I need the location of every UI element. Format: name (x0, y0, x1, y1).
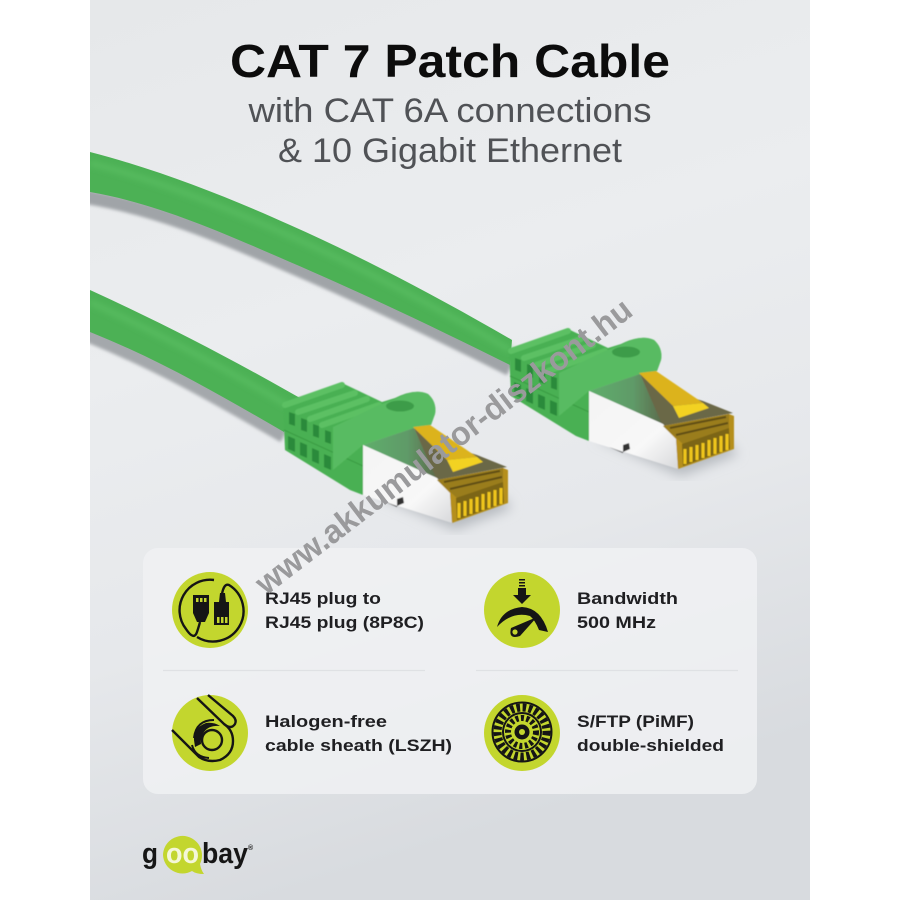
feature text: halogen-free: Halogen-free (265, 712, 387, 731)
lower cable (90, 290, 300, 432)
upper cable shadow (80, 196, 510, 369)
goobay logo: ® (248, 844, 254, 852)
goobay logo: oo (166, 838, 199, 870)
feature text: shielding: S/FTP (PiMF) (577, 712, 694, 731)
feature panel (143, 548, 757, 794)
goobay logo (142, 836, 254, 874)
connector upper (509, 329, 738, 476)
upper cable (90, 152, 512, 365)
feature text: halogen-free (265, 712, 452, 755)
title: CAT 7 Patch Cable (230, 35, 670, 87)
feature text: RJ45: RJ45 plug to (265, 589, 381, 608)
feature text: RJ45 (265, 589, 424, 632)
icon: RJ45 plugs (172, 572, 248, 648)
icon: S/FTP shielded (484, 695, 560, 771)
feature text: RJ45: RJ45 plug (8P8C) (265, 613, 424, 632)
feature text: shielding: double-shielded (577, 736, 724, 755)
feature text: bandwidth: 500 MHz (577, 613, 656, 632)
goobay logo: bay (202, 838, 248, 870)
subtitle: with CAT 6A connections (247, 92, 652, 130)
watermark: www.akkumulator-diszkont.hu (247, 290, 639, 602)
cable illustration (80, 152, 738, 530)
feature text: halogen-free: cable sheath (LSZH) (265, 736, 452, 755)
image background panel (90, 0, 810, 900)
subtitle: & 10 Gigabit Ethernet (278, 132, 623, 170)
goobay logo: g (142, 838, 158, 870)
feature text: bandwidth (577, 589, 678, 632)
connector lower (283, 383, 512, 530)
feature text: bandwidth: Bandwidth (577, 589, 678, 608)
icon: halogen-free sheath (172, 695, 248, 771)
subtitle (247, 92, 652, 170)
icon: bandwidth gauge (484, 572, 560, 648)
lower cable shadow (80, 332, 284, 436)
feature text: shielding (577, 712, 724, 755)
